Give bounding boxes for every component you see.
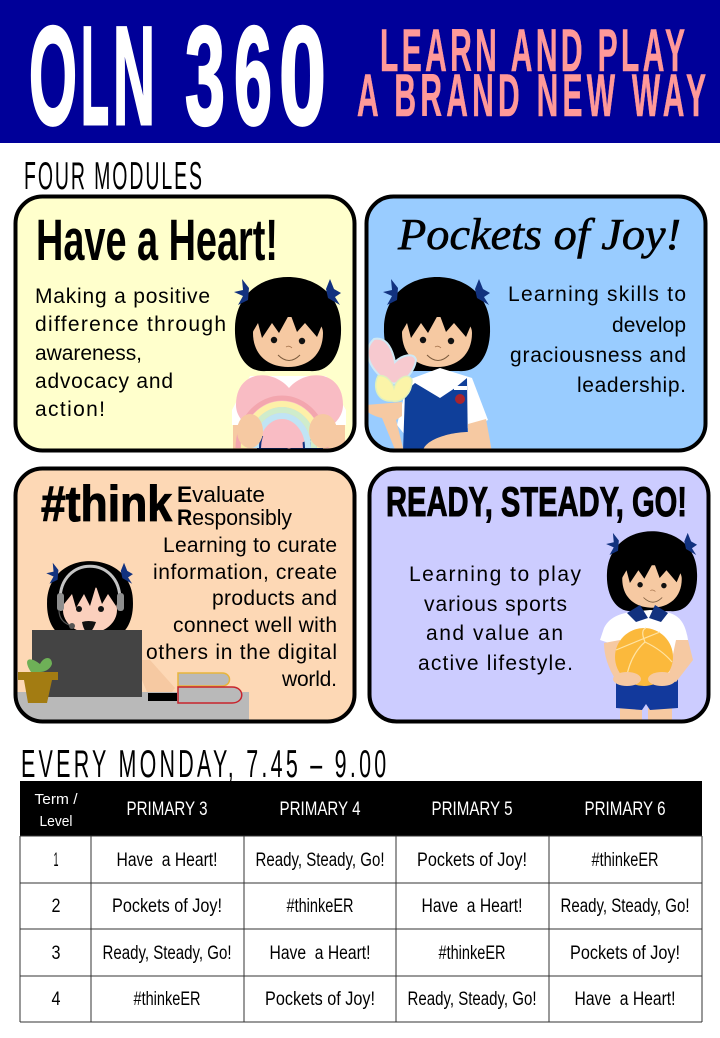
panel: Have a Heart	[14, 195, 356, 452]
table row: term 2: #thinkeER	[286, 896, 354, 917]
text block: #thinkER description	[146, 534, 337, 691]
table row: term 1: Ready, Steady, Go!	[256, 850, 384, 871]
table row: term 1: 1	[54, 850, 58, 871]
table row: term 2	[52, 896, 690, 917]
table row: term 4: Pockets of Joy!	[265, 989, 375, 1010]
text block: Pockets of Joy description	[508, 283, 686, 397]
table header row: PRIMARY 4	[280, 799, 361, 820]
table header row: PRIMARY 3	[126, 799, 208, 820]
table header row: Term /	[34, 791, 78, 808]
text block: Have a Heart description: advocacy and	[35, 370, 173, 393]
text block: Ready, Steady, Go description: and value an	[426, 622, 563, 645]
table row: term 2: Pockets of Joy!	[112, 896, 222, 917]
icon: girl holding netball	[600, 531, 697, 724]
table row: term 3	[52, 943, 680, 964]
subtitle: learn and play a brand new way: A BRAND NEW WAY	[357, 63, 706, 130]
text block: Pockets of Joy description: develop	[612, 314, 686, 337]
heading: four modules: FOUR MODULES	[24, 154, 202, 198]
table row: term 4	[52, 989, 676, 1010]
table row: term 1: Pockets of Joy!	[417, 850, 527, 871]
panel: Pockets of Joy	[365, 195, 707, 452]
table row: term 4: #thinkeER	[134, 989, 200, 1010]
icon: girl with headset at laptop	[17, 561, 249, 724]
title: OLN 360: N	[113, 0, 155, 154]
table header row: PRIMARY 5	[432, 799, 512, 820]
table row: term 1: Have a Heart!	[116, 850, 218, 871]
panel: Ready, Steady, Go	[368, 467, 710, 724]
heading: every Monday schedule: EVERY MONDAY, 7.45 – 9.00	[21, 742, 386, 786]
text block: Pockets of Joy description: Learning skills to	[508, 283, 686, 306]
text block: Pockets of Joy description: graciousness and	[510, 344, 686, 367]
table row: term 3: Have a Heart!	[270, 943, 370, 964]
table row: term 3: #thinkeER	[438, 943, 506, 964]
text block: #thinkER description: information, create	[153, 561, 337, 584]
table row: term 4: 4	[52, 989, 61, 1010]
text block: Ready, Steady, Go description: various sports	[424, 593, 567, 616]
heading: Have a Heart: Have a Heart!	[36, 208, 278, 273]
subtitle: learn and play a brand new way	[357, 18, 706, 130]
icon: girl in pinafore with butterflies	[365, 277, 492, 452]
text block: #thinkER description: others in the digital	[146, 641, 337, 664]
table row: term 3: Pockets of Joy!	[570, 943, 680, 964]
table row: term 3: Ready, Steady, Go!	[102, 943, 232, 964]
text block: Ready, Steady, Go description: Learning to play	[409, 563, 582, 586]
heading: #think Evaluate Responsibly: Responsibly	[177, 505, 292, 530]
text block: Pockets of Joy description: leadership.	[577, 374, 686, 397]
table header row: Level	[40, 813, 72, 830]
table row: term 2: Ready, Steady, Go!	[560, 896, 690, 917]
table row: term 3: 3	[52, 943, 60, 964]
table: module rotation by term and level	[20, 781, 702, 1022]
heading: Pockets of Joy: Pockets of Joy!	[397, 210, 681, 259]
table row: term 1	[54, 850, 658, 871]
header banner	[0, 0, 720, 154]
table header row: PRIMARY 6	[584, 799, 666, 820]
text block: #thinkER description: Learning to curate	[163, 534, 337, 557]
title: OLN 360: O	[29, 0, 77, 154]
text block: Have a Heart description: action!	[35, 398, 105, 421]
title: OLN 360	[29, 0, 326, 154]
table row: term 2: Have a Heart!	[422, 896, 522, 917]
heading: #think Evaluate Responsibly	[41, 476, 292, 532]
title: OLN 360: L	[81, 0, 109, 154]
text block: #thinkER description: world.	[281, 668, 337, 691]
title: OLN 360: 6	[234, 0, 272, 154]
table row: term 1: #thinkeER	[592, 850, 658, 871]
text block: Have a Heart description: difference through	[35, 313, 226, 336]
table header row	[20, 781, 702, 836]
title: OLN 360: 0	[279, 0, 326, 154]
icon: girl holding rainbow heart	[232, 277, 346, 452]
title: OLN 360: 3	[185, 0, 225, 154]
text block: #thinkER description: connect well with	[173, 614, 337, 637]
text block: Ready, Steady, Go description: active lifestyle.	[418, 652, 573, 675]
text block: #thinkER description: products and	[212, 587, 337, 610]
panel: #thinkER	[14, 467, 356, 724]
table row: term 2: 2	[52, 896, 60, 917]
text block: Have a Heart description	[35, 285, 226, 421]
text block: Have a Heart description: awareness,	[35, 342, 142, 365]
heading: #think Evaluate Responsibly: Evaluate	[177, 482, 265, 507]
table row: term 4: Have a Heart!	[574, 989, 676, 1010]
heading: #think Evaluate Responsibly: #think	[41, 476, 172, 532]
table row: term 4: Ready, Steady, Go!	[408, 989, 536, 1010]
text block: Ready, Steady, Go description	[409, 563, 582, 675]
text block: Have a Heart description: Making a positive	[35, 285, 210, 308]
subtitle: learn and play a brand new way: LEARN AND PLAY	[380, 18, 685, 85]
